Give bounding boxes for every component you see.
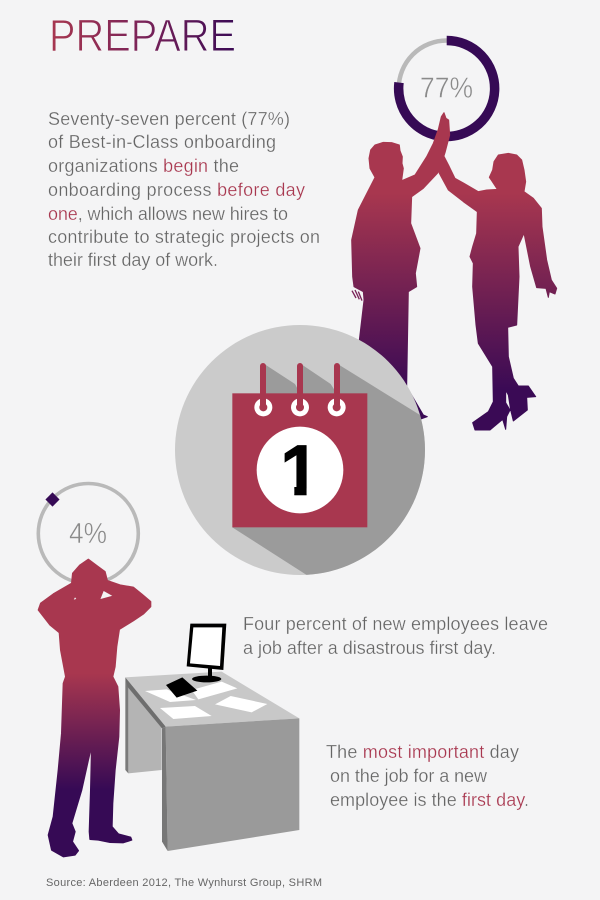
chart: 77% ring: 77%	[420, 72, 473, 104]
papers	[145, 682, 267, 719]
illustration: desk with monitor and papers	[125, 624, 299, 851]
chart: 77% ring	[399, 40, 495, 136]
text block: intro paragraph	[48, 109, 320, 270]
icon: calendar in circle: 1	[280, 431, 320, 511]
desk	[125, 672, 299, 851]
text block: most important day: The most important day	[326, 742, 519, 762]
text block: most important day	[326, 742, 529, 810]
silhouette: woman high-fiving	[439, 153, 557, 430]
text block: four percent: a job after a disastrous first day.	[243, 638, 496, 658]
text block: intro paragraph: organizations begin the	[48, 156, 239, 176]
silhouette: man high-fiving	[352, 113, 450, 419]
text block: intro paragraph: their first day of work.	[48, 250, 218, 270]
keyboard	[166, 677, 197, 698]
text block: most important day: employee is the first day.	[330, 790, 529, 810]
title: PREPARE	[49, 10, 236, 61]
text block: intro paragraph: Seventy-seven percent (77%)	[48, 109, 290, 129]
text block: intro paragraph: onboarding process before day	[48, 180, 305, 200]
text block: intro paragraph: one, which allows new hires to	[48, 204, 288, 224]
silhouette: stressed man	[38, 559, 151, 857]
chart: 4% ring: 4%	[69, 518, 107, 550]
text block: intro paragraph: contribute to strategic projects on	[48, 227, 320, 247]
source note: Source: Aberdeen 2012, The Wynhurst Group, SHRM	[46, 877, 322, 889]
text block: four percent	[243, 614, 548, 658]
text block: most important day: on the job for a new	[330, 766, 488, 786]
chart: 4% ring	[38, 484, 138, 584]
text block: four percent: Four percent of new employees leave	[243, 614, 548, 634]
monitor	[187, 624, 226, 682]
icon: calendar in circle	[175, 325, 425, 575]
text block: intro paragraph: of Best-in-Class onboarding	[48, 132, 276, 152]
